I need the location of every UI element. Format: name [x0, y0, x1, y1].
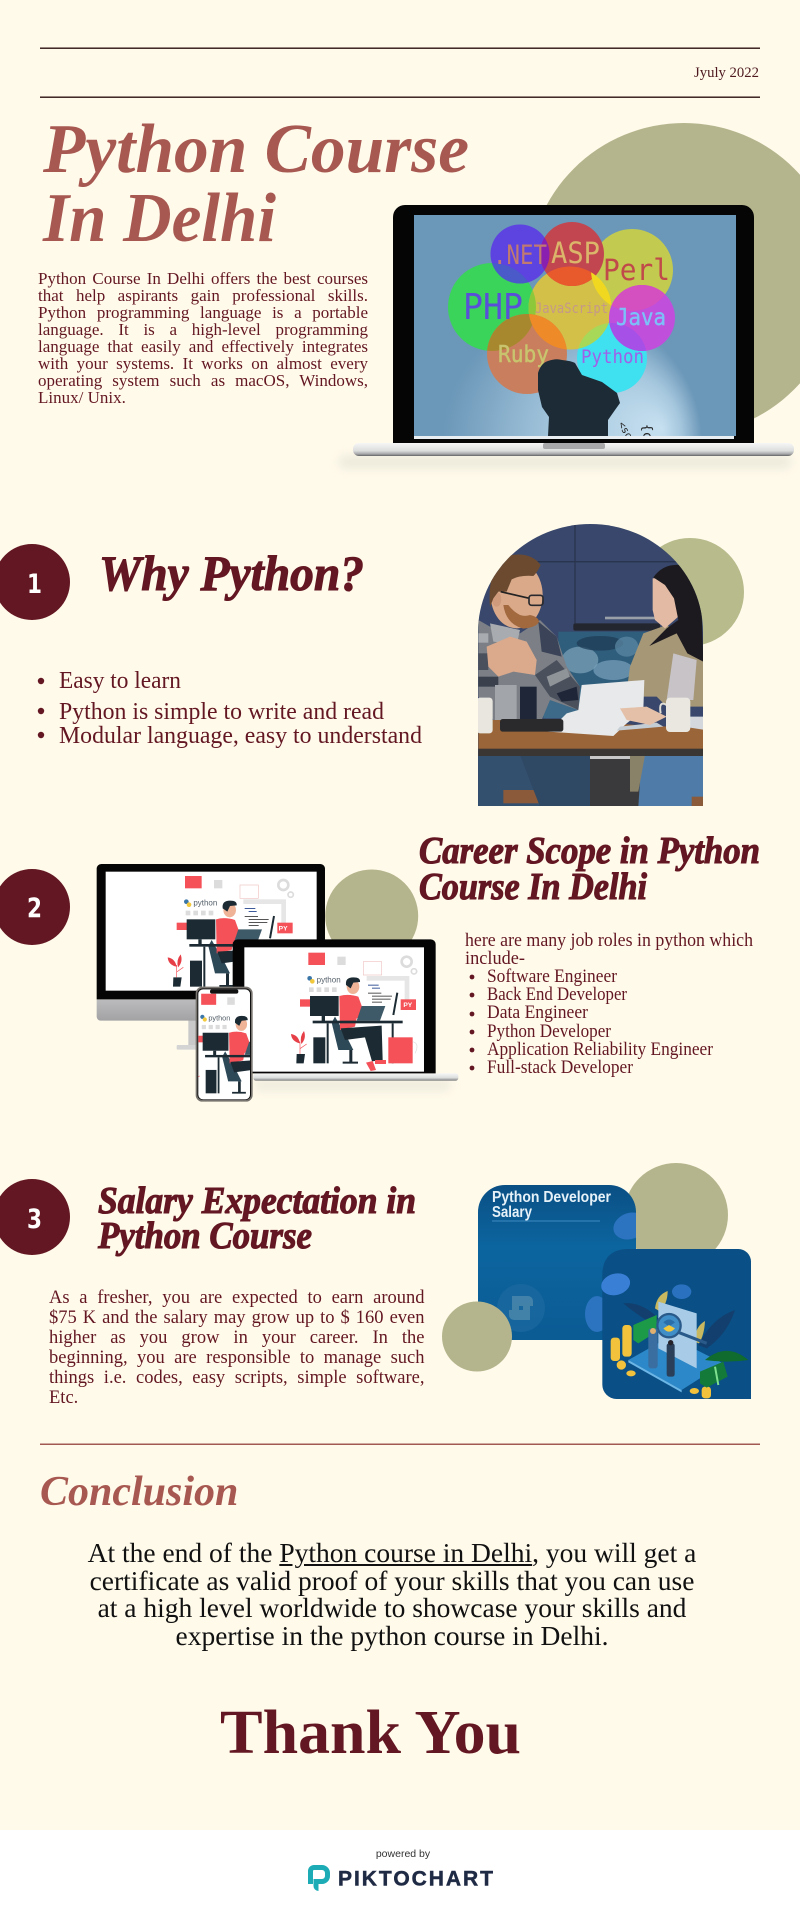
salary card 2 [599, 1249, 751, 1399]
phone [196, 986, 253, 1102]
piktochart wordmark: PIKTOCHART [338, 1868, 493, 1890]
papers [548, 680, 644, 736]
footer band [0, 1830, 800, 1910]
salary paragraph [49, 1288, 426, 1418]
bubble labels: Perl [603, 253, 670, 287]
salary card 1: Salary [492, 1204, 532, 1221]
header rule: bottom [40, 96, 760, 98]
header rule: top [40, 48, 760, 49]
photo: two people at table [470, 520, 710, 810]
intro paragraph [38, 270, 369, 410]
heading: Course In Delhi [419, 866, 647, 908]
salary paragraph: beginning, you are responsible to manage such [49, 1348, 424, 1368]
bubble labels: Java [616, 305, 666, 331]
heading: Career Scope in Python [419, 830, 760, 872]
olive circle top [624, 1163, 728, 1267]
laptop shadow [340, 456, 790, 468]
job roles list: Full-stack Developer [487, 1058, 633, 1078]
woman [626, 625, 703, 707]
heading [419, 830, 760, 908]
man [478, 620, 580, 720]
thank you: Thank You [220, 1699, 521, 1767]
job roles list: Python Developer [487, 1022, 611, 1042]
job roles list: include- [465, 949, 525, 969]
bubble labels: PHP [463, 287, 523, 328]
bubble labels: Python [581, 346, 644, 368]
laptop [353, 205, 794, 456]
conclusion divider [40, 1444, 760, 1445]
bubble labels: Ruby [498, 342, 549, 368]
number badge 1: 1 [27, 569, 42, 600]
bullet list: Python is simple to write and read [59, 699, 384, 725]
hero illustration: olive circle with laptop [340, 123, 800, 468]
bubble labels: ASP [551, 236, 600, 270]
salary paragraph: things i.e. codes, easy scripts, simple software, [49, 1368, 424, 1388]
olive circle behind photo [636, 538, 744, 646]
title [42, 111, 469, 257]
number badge 3: 3 [27, 1204, 42, 1235]
job roles list: Back End Developer [487, 985, 627, 1005]
heading: Why Python? [99, 545, 364, 601]
heading [97, 1180, 416, 1257]
conclusion paragraph [62, 1539, 722, 1654]
salary paragraph: $75 K and the salary may grow up to $ 160 even [49, 1308, 424, 1328]
conclusion paragraph: at a high level worldwide to showcase your skills and [98, 1592, 686, 1623]
desktop monitor: PY [279, 925, 288, 932]
job roles list: here are many job roles in python which [465, 931, 753, 951]
heading: Python Course [97, 1215, 312, 1257]
language bubbles [448, 222, 675, 441]
bullet list [38, 668, 422, 749]
section 1: why python [0, 520, 744, 810]
job roles list: Data Engineer [487, 1003, 588, 1023]
salary paragraph: higher as you grow in your career. In the [49, 1328, 424, 1348]
title: In Delhi [42, 180, 277, 257]
number badge 2: 2 [27, 893, 42, 924]
number badge 3 [0, 1179, 70, 1255]
language bubbles: {c [639, 424, 655, 440]
section 3: salary expectation [0, 1163, 751, 1418]
table and lower area [590, 759, 640, 806]
intro paragraph: language. It is a high-level programming [38, 320, 368, 339]
bubble labels [463, 236, 670, 368]
bullet list: Easy to learn [59, 668, 181, 694]
salary card 1 [478, 1185, 650, 1340]
olive circle [528, 123, 800, 435]
intro paragraph: language that easily and effectively integrates [38, 337, 368, 356]
responsive devices illustration [97, 864, 458, 1102]
job roles list [465, 931, 753, 1078]
conclusion paragraph: certificate as valid proof of your skills that you can use [90, 1564, 694, 1596]
section 2: career scope [0, 830, 760, 1102]
conclusion paragraph: expertise in the python course in Delhi. [175, 1620, 609, 1650]
title: Python Course [42, 111, 469, 188]
salary card 1: Python Developer [492, 1189, 611, 1206]
date: Jyuly 2022 [694, 65, 759, 81]
powered by: powered by [376, 1848, 431, 1860]
intro paragraph: operating system such as macOS, Windows, [38, 371, 368, 390]
bullet list: Modular language, easy to understand [59, 723, 422, 749]
intro paragraph: Linux/ Unix. [38, 388, 126, 407]
laptop: python [317, 975, 341, 984]
conclusion heading: Conclusion [40, 1469, 238, 1515]
bubble labels: .NET [493, 240, 547, 271]
device shadow [255, 1080, 450, 1090]
piktochart logo mark [310, 1868, 328, 1888]
number badge 1 [0, 544, 70, 620]
desktop monitor [97, 864, 325, 1050]
olive circle behind devices [325, 870, 418, 962]
salary paragraph: As a fresher, you are expected to earn around [49, 1288, 424, 1308]
intro paragraph: Python programming language is a portable [38, 303, 368, 322]
intro paragraph: that help aspirants gain professional skills. [38, 286, 368, 305]
floating code marks: <sc [615, 420, 634, 441]
laptop: PY [403, 1002, 413, 1009]
phone: python [208, 1014, 230, 1023]
job roles list: Application Reliability Engineer [487, 1040, 713, 1060]
olive circle small [442, 1302, 512, 1372]
laptop [233, 939, 458, 1081]
number badge 2 [0, 869, 70, 945]
heading: Salary Expectation in [98, 1180, 416, 1222]
salary paragraph: Etc. [49, 1388, 78, 1408]
desktop monitor: python [193, 898, 217, 907]
job roles list: Software Engineer [487, 967, 617, 987]
intro paragraph: with your systems. It works on almost every [38, 354, 368, 373]
silhouette [538, 359, 620, 436]
bubble labels: JavaScript [535, 301, 608, 317]
